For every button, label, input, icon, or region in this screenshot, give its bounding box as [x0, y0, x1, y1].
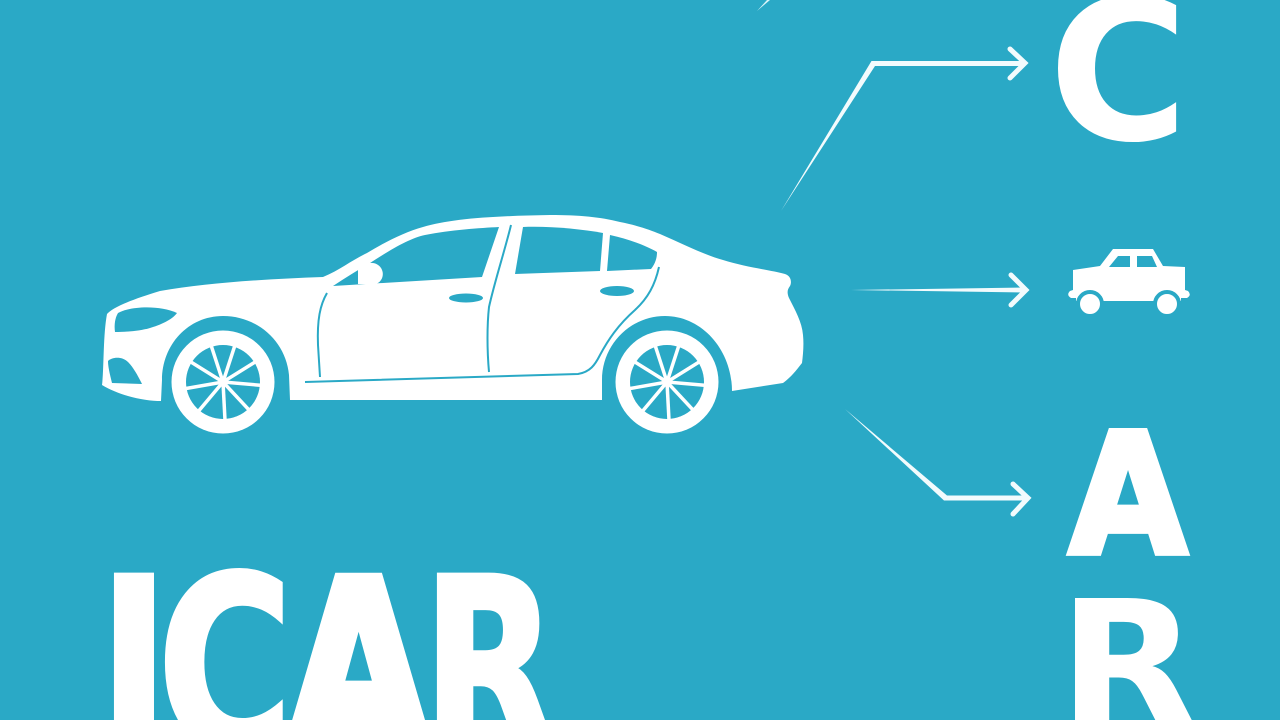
small car wheels — [1078, 292, 1179, 316]
headlight — [115, 307, 177, 332]
rear wheel — [616, 330, 718, 434]
fog lamp — [108, 358, 142, 384]
stray line fragment at top — [757, 0, 770, 11]
front side window — [333, 227, 499, 286]
heading: ICAR — [94, 525, 557, 720]
arrow: to small car — [851, 275, 1026, 305]
arrow: to letter A — [845, 409, 1028, 514]
wing mirror — [358, 263, 383, 284]
illustration: white sedan side view — [102, 215, 803, 434]
rear door window — [515, 227, 603, 274]
door seams — [305, 225, 659, 382]
door handles — [449, 286, 634, 302]
icon: small car — [1068, 249, 1190, 316]
small car windows — [1109, 256, 1157, 267]
arrow: to letter C — [781, 49, 1025, 211]
front wheel — [172, 330, 274, 434]
rear quarter window — [607, 235, 657, 271]
car body silhouette — [102, 215, 803, 401]
letter A, right column: A — [1069, 398, 1187, 592]
